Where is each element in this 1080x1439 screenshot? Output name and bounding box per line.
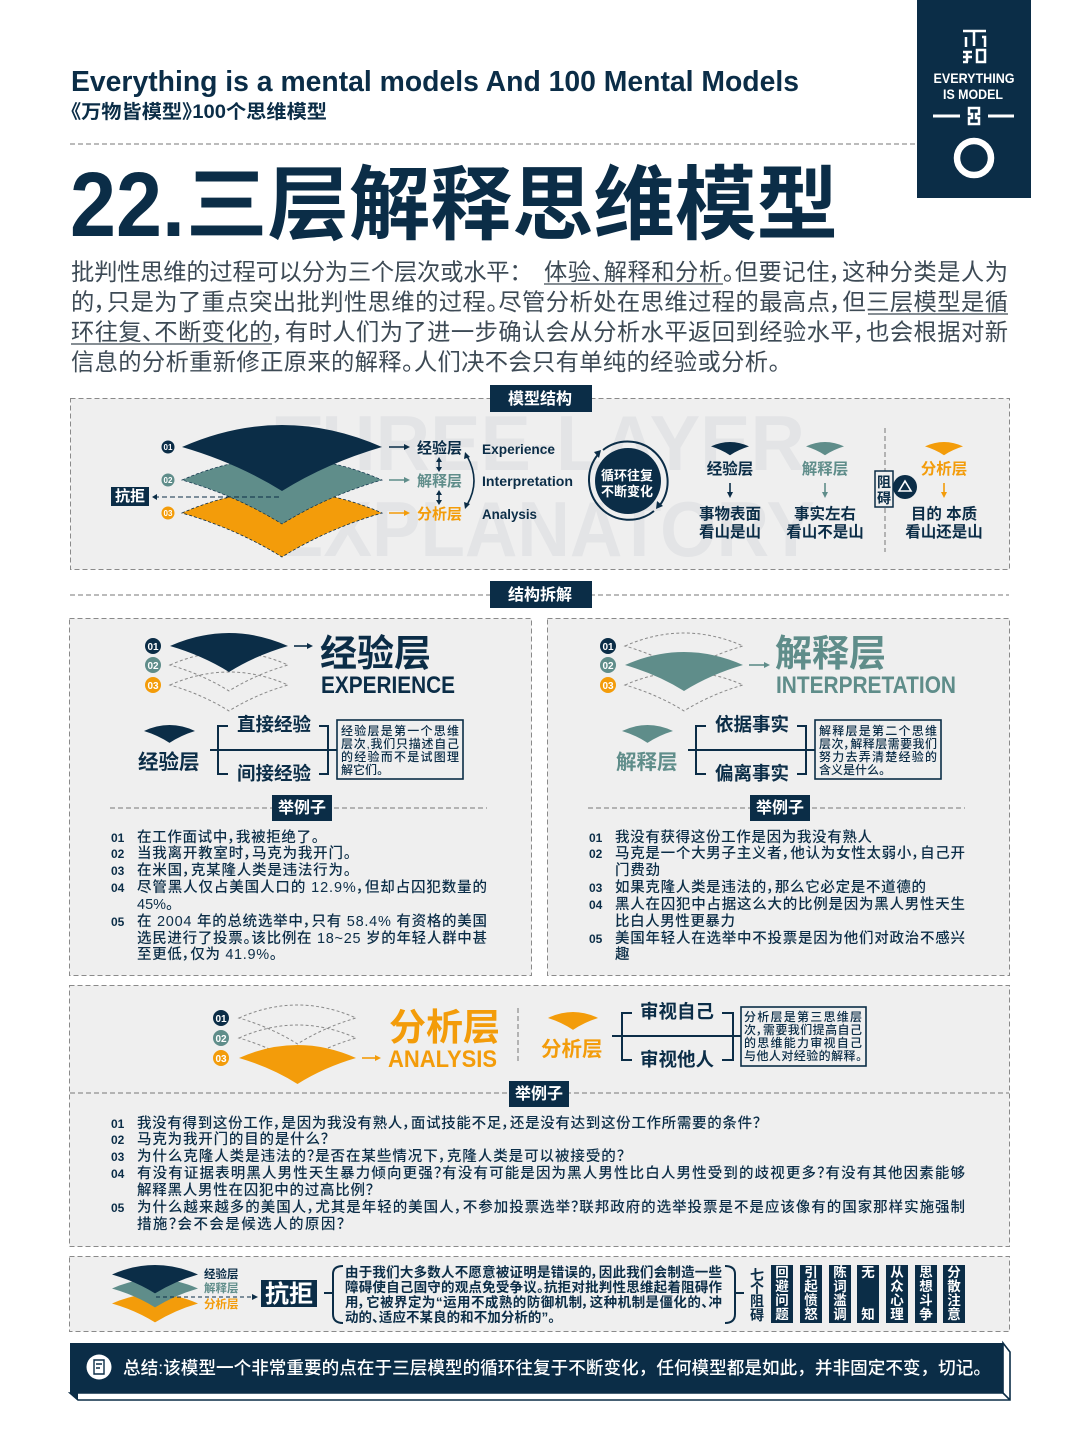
seven obstacles label: 阻 [750, 1293, 764, 1309]
number badges: 03 [164, 509, 173, 518]
obstacle badge: 碍 [877, 490, 891, 506]
examples list: 有没有证据表明黑人男性天生暴力倾向更强？有没有可能是因为黑人男性比白人男性受到的歧视更多？有没有其他因素能够 [137, 1164, 966, 1182]
obstacle tags: 从 [890, 1265, 904, 1280]
examples list: 04 [111, 1167, 125, 1181]
heading: structure breakdown: 结构拆解 [508, 586, 572, 604]
intro paragraph [71, 259, 1008, 375]
examples list: 为什么克隆人类是违法的？是否在某些情况下，克隆人类是可以被接受的？ [137, 1147, 624, 1165]
intro paragraph: 信息的分析重新修正原来的解释。人们决不会只有单纯的经验或分析。 [71, 349, 780, 375]
examples list: 03 [111, 1150, 125, 1164]
obstacle tags: 想 [919, 1278, 933, 1294]
layer title [388, 1007, 500, 1073]
logo panel: IS MODEL [943, 86, 1003, 102]
layer labels: Interpretation [482, 473, 573, 489]
obstacle badge [875, 471, 917, 507]
branch diagram [138, 714, 463, 784]
layer diagram: 02 [147, 661, 159, 672]
examples list: 我没有得到这份工作，是因为我没有熟人，面试技能不足，还是没有达到这份工作所需要的条件？ [137, 1114, 760, 1132]
obstacle tags: 散 [947, 1278, 961, 1294]
obstacle tags: 词 [833, 1279, 847, 1294]
obstacle tags: 意 [947, 1306, 961, 1322]
obstacle badge: 阻 [877, 474, 891, 490]
layer diagram: 01 [602, 642, 614, 653]
layer diagram: 02 [215, 1034, 227, 1045]
seven obstacles label [750, 1267, 764, 1323]
obstacle tags: 题 [775, 1307, 789, 1322]
examples list: 如果克隆人类是违法的，那么它必定是不道德的 [615, 878, 926, 896]
intro paragraph: 环往复、不断变化的，有时人们为了进一步确认会从分析水平返回到经验水平，也会根据对新 [71, 319, 1008, 345]
layer labels: 解释层 [417, 473, 462, 490]
examples list: 02 [111, 847, 125, 861]
examples list: 在 2004 年的总统选举中，只有 58.4% 有资格的美国 [137, 912, 487, 930]
examples list: 当我离开教室时，马克为我开门。 [137, 844, 351, 862]
layer diagram [145, 633, 313, 711]
obstacle tags: 滥 [833, 1292, 847, 1308]
heading: examples [272, 795, 332, 821]
examples list [589, 828, 965, 963]
examples list: 05 [589, 932, 603, 946]
obstacle tags: 陈 [833, 1264, 847, 1280]
branch diagram: 解释层是第二个思维 [819, 723, 937, 738]
summary bar [70, 1343, 1010, 1400]
layer title: 分析层 [389, 1007, 500, 1048]
heading: examples [509, 1081, 569, 1107]
examples list: 至更低，仅为 41.9%。 [137, 946, 277, 963]
panel: analysis layer [70, 986, 1010, 1246]
examples list: 马克是一个大男子主义者，他认为女性太弱小，自己开 [615, 844, 965, 862]
header: 《万物皆模型》100个思维模型 [71, 101, 327, 123]
title: 22. [70, 154, 185, 256]
branch diagram: 偏离事实 [715, 763, 789, 784]
branch diagram: 间接经验 [237, 763, 312, 784]
examples list: 05 [111, 1201, 125, 1215]
examples list: 05 [111, 915, 125, 929]
column: experience: 看山是山 [699, 523, 761, 541]
layer diagram: 03 [147, 681, 159, 692]
examples list: 03 [111, 864, 125, 878]
number badges: 02 [164, 476, 173, 485]
branch diagram: 次，需要我们提高自己 [744, 1022, 862, 1037]
branch diagram: 分析层是第三思维层 [744, 1009, 862, 1024]
examples list: 02 [111, 1133, 125, 1147]
column: interpretation: 事实左右 [794, 504, 856, 523]
obstacle tags: 怒 [804, 1306, 818, 1322]
layer diagram [213, 1005, 381, 1084]
branch diagram: 含义是什么。 [819, 762, 885, 777]
layer title: 经验层 [320, 633, 431, 674]
examples list: 解释黑人男性在囚犯中的过高比例？ [137, 1182, 373, 1199]
examples list: 01 [111, 831, 125, 845]
examples list: 在米国，克某隆人类是违法行为。 [137, 861, 351, 879]
examples list: 措施？会不会是候选人的原因？ [137, 1216, 344, 1233]
examples list: 04 [589, 898, 603, 912]
header: Everything is a mental models And 100 Mental Models [71, 66, 799, 98]
branch diagram: 直接经验 [237, 714, 312, 735]
obstacle tags: 调 [833, 1307, 847, 1322]
examples list: 选民进行了投票。该比例在 18~25 岁的年轻人群中甚 [137, 929, 487, 947]
resistance tag: 抗拒 [115, 487, 145, 505]
layer labels [389, 439, 573, 523]
icon: stacked layers [182, 425, 382, 557]
panel: model structure [70, 385, 1010, 573]
obstacle tags [771, 1264, 965, 1323]
layer title: 解释层 [775, 633, 886, 674]
branch diagram: 经验层 [138, 750, 200, 774]
watermark: THREE-LAYER [275, 399, 805, 487]
examples list: 01 [111, 1117, 125, 1131]
layer title [775, 633, 956, 699]
title: 三层解释思维模型 [186, 161, 838, 251]
examples list: 在工作面试中，我被拒绝了。 [137, 828, 319, 846]
obstacle tags: 心 [890, 1293, 904, 1308]
obstacle tags: 争 [919, 1306, 933, 1322]
column: interpretation [786, 442, 864, 541]
panel: interpretation layer [548, 618, 1010, 976]
obstacle tags: 思 [919, 1265, 933, 1280]
branch diagram: 与他人对经验的解释。 [744, 1048, 862, 1063]
obstacle tags: 回 [775, 1265, 789, 1280]
obstacle tags: 避 [775, 1278, 789, 1294]
icon: notes [86, 1354, 112, 1380]
number badges: 01 [164, 443, 173, 452]
layer title [320, 633, 455, 699]
resistance description: 障碍使自己固守的观点免受争议。抗拒对批判性思维起着阻碍作 [345, 1279, 722, 1295]
layer diagram: 01 [215, 1014, 227, 1025]
obstacle tags: 起 [804, 1279, 818, 1294]
layer labels [204, 1267, 238, 1311]
examples list: 黑人在囚犯中占据这么大的比例是因为黑人男性天生 [615, 896, 965, 913]
watermark: EXPLANATORY [275, 485, 815, 573]
brand name: EVERYTHING [934, 70, 1015, 86]
branch diagram: 层次，解释层需要我们 [819, 736, 937, 751]
resistance description: 用，它被界定为“运用不成熟的防御机制，这种机制是僵化的、冲 [345, 1294, 722, 1310]
examples list: 03 [589, 881, 603, 895]
examples list [111, 828, 487, 963]
resistance description: 动的、适应不某良的和不加分析的”。 [345, 1309, 555, 1325]
examples list [111, 1114, 966, 1233]
watermark [275, 399, 815, 573]
column: experience: 事物表面 [699, 504, 761, 523]
branch diagram: 审视他人 [640, 1049, 715, 1070]
layer labels: 经验层 [204, 1267, 238, 1281]
obstacle tags: 注 [947, 1292, 961, 1308]
branch diagram: 努力去弄清楚经验的 [819, 749, 937, 764]
branch diagram: 依据事实 [715, 714, 789, 735]
header [71, 66, 799, 123]
column: interpretation: 解释层 [802, 460, 848, 478]
column: experience: 经验层 [707, 459, 753, 478]
resistance description: 由于我们大多数人不愿意被证明是错误的，因此我们会制造一些 [345, 1264, 722, 1280]
heading: examples: 举例子 [756, 798, 804, 817]
obstacle tags: 知 [861, 1307, 875, 1322]
layer labels: 经验层 [417, 439, 462, 457]
heading: examples [750, 795, 810, 821]
branch diagram: 解释层 [616, 751, 678, 774]
branch diagram [541, 1001, 866, 1070]
logo panel [917, 0, 1031, 198]
resistance description [324, 1264, 744, 1325]
heading: examples: 举例子 [515, 1084, 563, 1103]
layer title: INTERPRETATION [776, 672, 956, 699]
obstacle tags: 无 [861, 1265, 875, 1280]
seven obstacles label: 个 [750, 1280, 764, 1296]
seven obstacles label: 七 [750, 1267, 764, 1283]
obstacle tags: 愤 [804, 1292, 818, 1308]
layer diagram: 03 [602, 681, 614, 692]
examples list: 45%。 [137, 897, 173, 913]
layer labels: 分析层 [204, 1297, 238, 1311]
heading: model structure: 模型结构 [508, 390, 572, 408]
obstacle tags: 分 [947, 1265, 961, 1280]
column: analysis: 目的 本质 [911, 504, 977, 523]
obstacle tags: 斗 [919, 1293, 933, 1308]
branch diagram: 的思维能力审视自己 [744, 1035, 862, 1050]
examples list: 比白人男性更暴力 [615, 913, 735, 930]
examples list: 趣 [615, 946, 630, 963]
examples list: 01 [589, 831, 603, 845]
layer labels: 分析层 [417, 505, 462, 523]
heading: examples: 举例子 [278, 798, 326, 817]
number badges [162, 440, 174, 520]
icon: stacked layers [112, 1265, 258, 1322]
column: analysis: 分析层 [921, 459, 967, 478]
resistance tag: 抗拒 [265, 1281, 313, 1308]
heading: model structure [490, 385, 592, 412]
panel: resistance [70, 1256, 1010, 1332]
column: interpretation: 看山不是山 [786, 523, 864, 541]
summary text: 总结:该模型一个非常重要的点在于三层模型的循环往复于不断变化，任何模型都是如此，并非固定不变，切记。 [123, 1358, 991, 1378]
examples list: 为什么越来越多的美国人，尤其是年轻的美国人，不参加投票选举？联邦政府的选举投票是不是应该像有的国家那样实施强制 [137, 1198, 965, 1216]
examples list: 我没有获得这份工作是因为我没有熟人 [615, 828, 872, 846]
obstacle tags: 众 [890, 1279, 904, 1294]
examples list: 04 [111, 881, 125, 895]
examples list: 美国年轻人在选举中不投票是因为他们对政治不感兴 [615, 929, 965, 947]
column: analysis [905, 442, 983, 541]
icon: brand mark [963, 31, 986, 62]
icon: ring [957, 141, 991, 175]
layer title: ANALYSIS [388, 1046, 497, 1073]
branch diagram: 审视自己 [640, 1001, 714, 1022]
column: analysis: 看山还是山 [905, 523, 983, 541]
layer labels: 解释层 [204, 1281, 238, 1295]
icon: cycle circle: 不断变化 [601, 484, 653, 499]
layer diagram: 01 [147, 642, 159, 653]
branch diagram [616, 714, 941, 784]
panel: experience layer [70, 618, 532, 976]
branch diagram: 层次,我们只描述自己 [341, 736, 459, 751]
icon: cycle circle: 循环往复 [601, 468, 653, 483]
examples list: 马克为我开门的目的是什么？ [137, 1131, 328, 1148]
intro paragraph: 批判性思维的过程可以分为三个层次或水平： [71, 259, 521, 285]
layer diagram [600, 633, 770, 711]
intro paragraph: 体验、解释和分析。但要记住，这种分类是人为 [544, 259, 1008, 285]
examples list: 门费劲 [615, 862, 660, 879]
layer title: EXPERIENCE [321, 672, 455, 699]
intro paragraph: 的，只是为了重点突出批判性思维的过程。尽管分析处在思维过程的最高点，但三层模型是循 [71, 289, 1008, 315]
layer labels: Analysis [482, 506, 537, 522]
heading: structure breakdown [490, 581, 592, 608]
obstacle tags: 问 [775, 1293, 789, 1308]
icon: cycle circle [589, 442, 668, 520]
column: experience [699, 442, 761, 541]
layer labels: Experience [482, 441, 555, 457]
branch diagram: 分析层 [541, 1038, 602, 1061]
layer diagram: 03 [215, 1054, 227, 1065]
obstacle tags: 引 [804, 1265, 818, 1280]
branch diagram: 经验层是第一个思维 [341, 723, 459, 738]
obstacle tags: 理 [890, 1307, 904, 1322]
branch diagram: 的经验而不是试图理 [341, 749, 459, 764]
examples list: 尽管黑人仅占美国人口的 12.9%，但却占囚犯数量的 [137, 878, 487, 896]
branch diagram: 解它们。 [341, 762, 383, 777]
resistance tag [111, 487, 282, 506]
seven obstacles label: 碍 [750, 1307, 764, 1323]
layer diagram: 02 [602, 661, 614, 672]
examples list: 02 [589, 847, 603, 861]
